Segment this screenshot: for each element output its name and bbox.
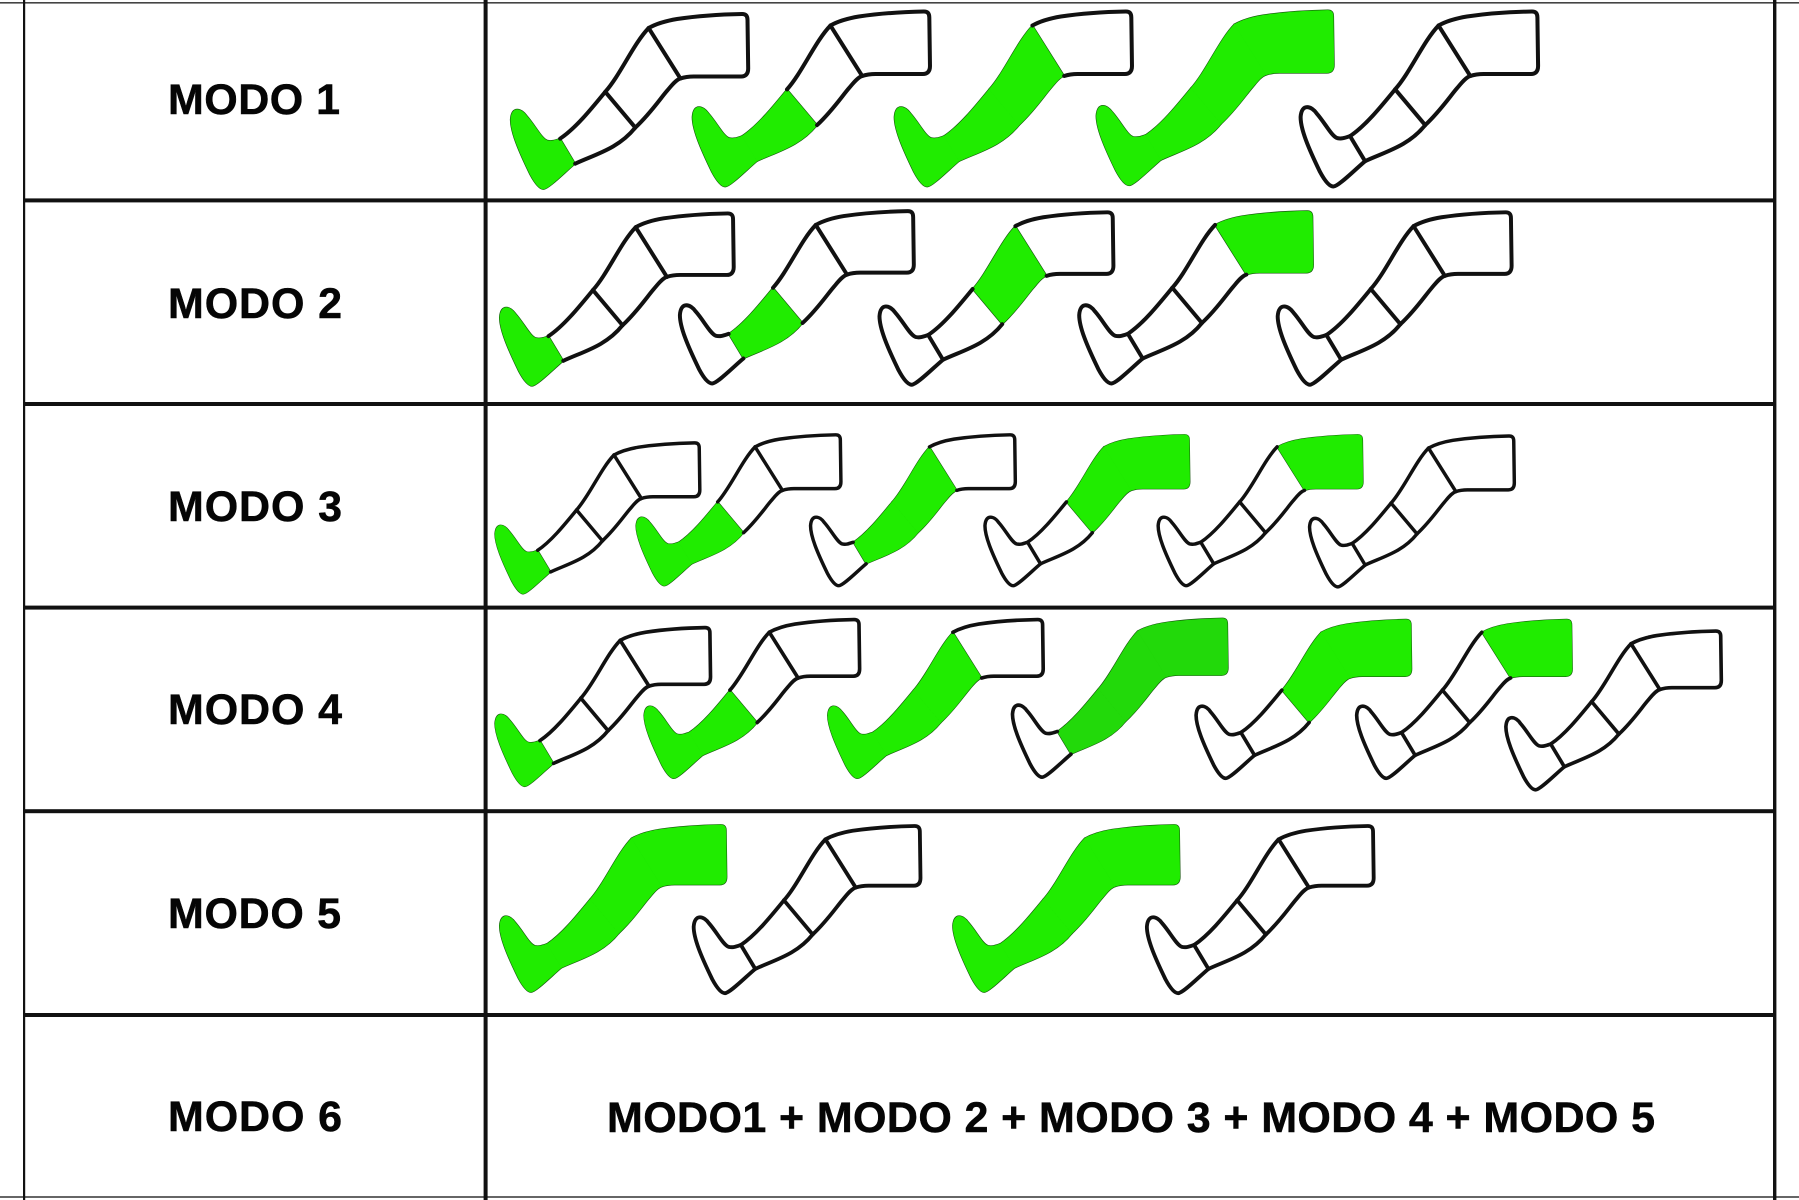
leg 4: whole leg bbox=[1096, 10, 1334, 185]
row: MODO 5 bbox=[168, 825, 1374, 993]
leg 3: knee bbox=[879, 212, 1113, 385]
leg 2: calf bbox=[680, 211, 914, 384]
leg 2: foot and calf bbox=[693, 12, 930, 187]
combination text: MODO1 + MODO 2 + MODO 3 + MODO 4 + MODO 5 bbox=[607, 1094, 1655, 1142]
leg 5: empty bbox=[1278, 212, 1512, 385]
leg 5: empty bbox=[1301, 12, 1538, 187]
row: MODO 1 bbox=[168, 10, 1538, 189]
label: MODO 5: MODO 5 bbox=[168, 890, 341, 938]
leg 6: empty bbox=[1310, 436, 1514, 587]
label: MODO 1: MODO 1 bbox=[168, 76, 340, 124]
leg 1: foot bbox=[500, 213, 734, 386]
leg 4: thigh bbox=[1079, 211, 1313, 384]
leg 7: empty bbox=[1506, 631, 1721, 790]
leg 1: foot bbox=[511, 14, 748, 189]
label: MODO 6: MODO 6 bbox=[168, 1093, 342, 1141]
label: MODO 3: MODO 3 bbox=[168, 483, 342, 531]
leg 2: foot and calf bbox=[644, 620, 860, 778]
leg 1: foot bbox=[495, 628, 711, 786]
row: MODO 3 bbox=[168, 435, 1514, 594]
leg 6: thigh bbox=[1357, 620, 1572, 778]
leg 3: calf and knee bbox=[811, 435, 1015, 586]
leg 2: foot and calf bbox=[636, 435, 841, 586]
leg 1: whole leg bbox=[500, 825, 727, 992]
leg 5: thigh bbox=[1158, 435, 1363, 586]
leg 4: knee and thigh bbox=[985, 435, 1190, 586]
leg 4: empty bbox=[1147, 826, 1374, 993]
leg 5: knee and thigh bbox=[1196, 620, 1412, 778]
row: MODO 2 bbox=[168, 211, 1512, 386]
row: MODO 4 bbox=[168, 618, 1721, 790]
leg 1: foot bbox=[495, 443, 700, 594]
row: MODO 6 bbox=[168, 1093, 1655, 1142]
leg 4: calf, knee and thigh bbox=[1012, 618, 1228, 777]
leg 3: foot, calf and knee bbox=[895, 12, 1132, 187]
label: MODO 2: MODO 2 bbox=[168, 280, 342, 328]
leg 3: whole leg bbox=[953, 825, 1180, 992]
leg 2: empty bbox=[694, 826, 920, 993]
label: MODO 4: MODO 4 bbox=[168, 686, 342, 734]
leg 3: foot, calf and knee bbox=[828, 620, 1043, 778]
